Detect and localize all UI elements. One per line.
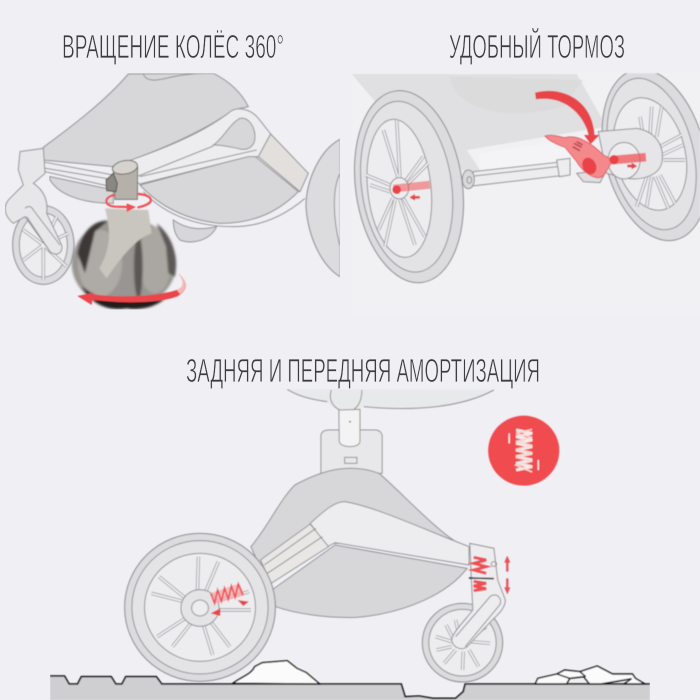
stroller seat background: [352, 74, 607, 173]
rocks left: [233, 661, 320, 684]
front axle tube: [35, 162, 113, 186]
swivel housing: [106, 159, 139, 199]
basket: [251, 468, 456, 577]
title: wheel rotation: ВРАЩЕНИЕ КОЛЁС 360°: [62, 28, 284, 65]
stroller basket lower: [140, 155, 298, 223]
left piston arrow: [392, 181, 430, 201]
stroller frame arm: [113, 109, 271, 184]
right wheel: [601, 72, 700, 242]
spring badge: [488, 416, 559, 486]
right piston arrow: [609, 153, 646, 169]
rear wheel: [125, 533, 275, 681]
brake housing: [577, 170, 607, 183]
brake pedal: [545, 135, 613, 178]
seat bottom: [287, 389, 494, 411]
axle: [472, 162, 567, 186]
panel: brake: [352, 72, 700, 284]
panel: suspension: [50, 389, 650, 700]
rotation arrow small: [106, 194, 151, 212]
frame arm: [310, 502, 469, 565]
small front fork and wheel: [13, 206, 74, 284]
blurred rotating wheel: [72, 218, 176, 309]
panel: 360 degree wheel rotation: [5, 73, 340, 309]
rocks right: [535, 666, 645, 684]
curved brake arrow: [535, 91, 599, 144]
rear wheel partial: [306, 139, 340, 277]
seat mount plate: [321, 430, 382, 473]
right hub: [598, 128, 662, 179]
front fork and wheel: [422, 543, 505, 682]
fork over blurred wheel: [99, 208, 152, 278]
rotation arrow large: [77, 273, 186, 305]
ground: [50, 676, 650, 700]
left wheel: [353, 90, 465, 284]
rear spring: [210, 583, 249, 616]
ground outline: [50, 676, 650, 698]
front spring: [469, 556, 510, 594]
stroller basket upper: [43, 73, 248, 167]
